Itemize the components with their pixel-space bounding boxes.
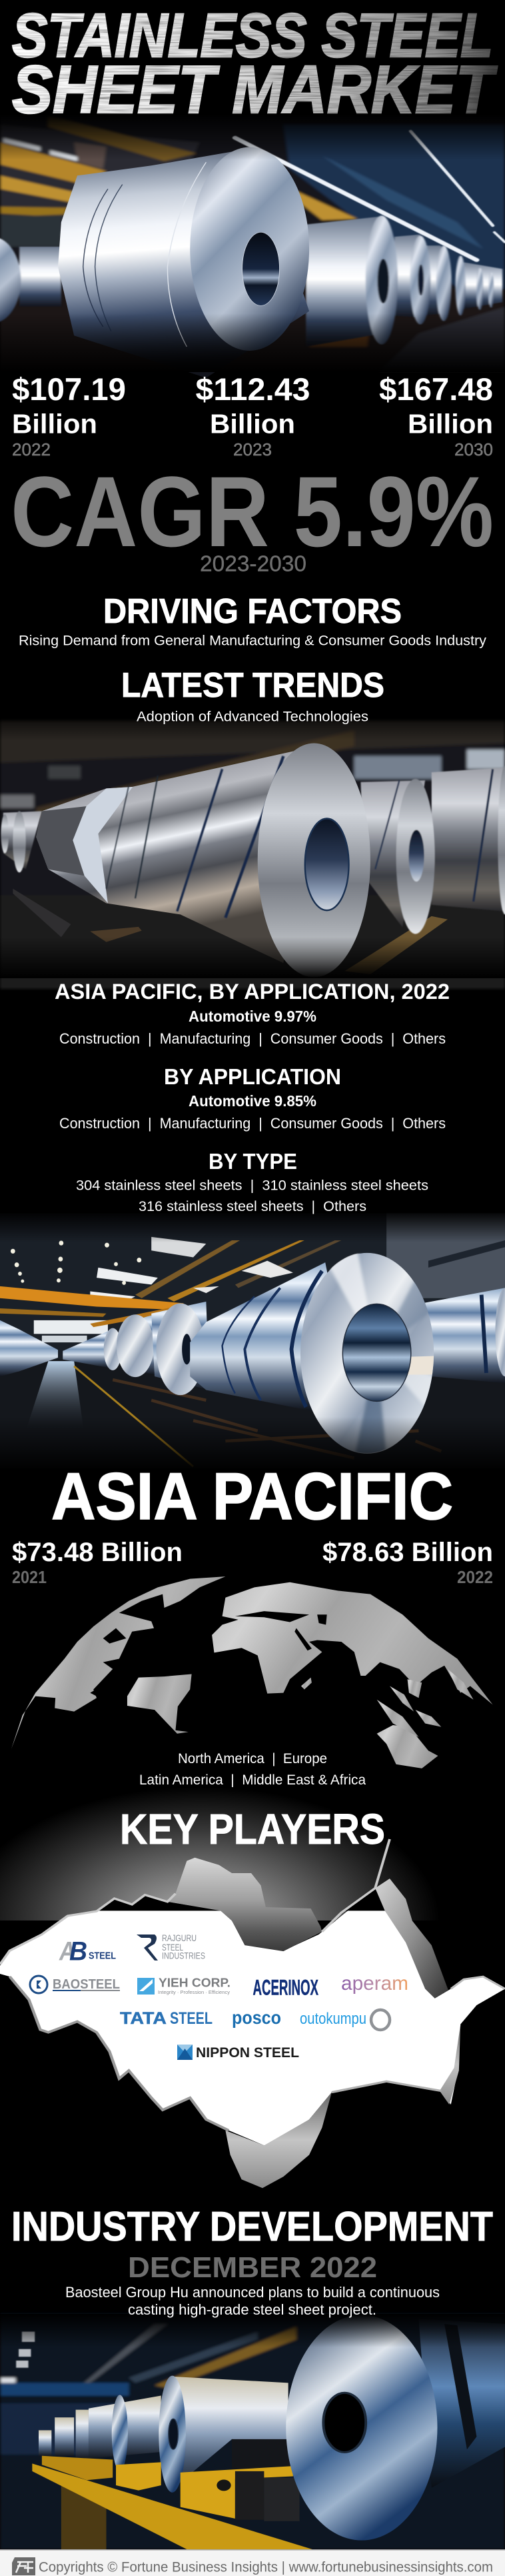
logo: Rajguru Steel Industries: STEEL xyxy=(162,1942,183,1953)
peeled metal flaps xyxy=(0,1839,505,2188)
stat: 2023 value: Billion xyxy=(210,408,295,439)
by application xyxy=(59,1064,446,1132)
logo: Outokumpu: outokumpu xyxy=(300,2010,366,2028)
stat: 2023 value: $112.43 xyxy=(196,371,310,407)
background rollers xyxy=(39,2376,288,2493)
stat: 2023 value xyxy=(196,371,310,459)
photo: row of coils in factory hall xyxy=(0,1210,505,1472)
regional value 2022: $78.63 Billion xyxy=(322,1538,493,1567)
key players heading: KEY PLAYERS xyxy=(120,1805,385,1853)
map: Eurasia and Africa xyxy=(212,1582,493,1704)
stat: 2022 value: $107.19 xyxy=(12,371,126,407)
logo: Yieh Corp xyxy=(137,1977,231,1995)
logo: Baosteel xyxy=(30,1976,120,1993)
industry development: casting high-grade steel sheet project. xyxy=(128,2301,376,2318)
other regions: Latin America | Middle East & Africa xyxy=(139,1772,366,1788)
main coil xyxy=(36,744,370,977)
stat: 2023 value: 2023 xyxy=(233,439,272,459)
logo: Yieh Corp: Integrity · Profession · Efficiency xyxy=(158,1991,231,1995)
logo: Nippon Steel: NIPPON STEEL xyxy=(196,2045,299,2061)
white torn area xyxy=(0,1910,505,2145)
logo: Baosteel: BAOSTEEL xyxy=(53,1977,120,1992)
logo: Yieh Corp: YIEH CORP. xyxy=(159,1977,231,1990)
by application: Construction | Manufacturing | Consumer Goods | Others xyxy=(59,1115,446,1132)
regional value 2022: 2022 xyxy=(457,1567,493,1587)
market value statistics xyxy=(12,371,493,459)
latest trends: Adoption of Advanced Technologies xyxy=(137,708,368,724)
ceiling light strips xyxy=(235,131,505,260)
stat: 2030 value: 2030 xyxy=(454,439,493,459)
main coil xyxy=(286,2315,505,2541)
logo: Rajguru Steel Industries: RAJGURU xyxy=(162,1933,197,1943)
logo: Tata Steel xyxy=(120,2009,213,2028)
map: Madagascar xyxy=(301,1678,312,1689)
industry development: Baosteel Group Hu announced plans to build a continuous xyxy=(65,2284,440,2301)
photo: coils on yellow conveyor rail xyxy=(0,2314,505,2549)
map: inland seas xyxy=(90,1611,327,1698)
industry development xyxy=(11,2204,493,2318)
Asia Pacific by application: Automotive 9.97% xyxy=(189,1008,316,1025)
driving factors xyxy=(19,592,486,648)
footer bar xyxy=(0,2549,505,2576)
stat: 2030 value: $167.48 xyxy=(379,371,493,407)
background coils xyxy=(1,766,505,934)
logo: Posco: posco xyxy=(232,2007,281,2028)
industry development: DECEMBER 2022 xyxy=(128,2251,377,2284)
by type xyxy=(76,1149,428,1214)
driving factors: DRIVING FACTORS xyxy=(103,592,402,631)
other regions: North America | Europe xyxy=(178,1750,327,1766)
far coils xyxy=(0,1302,209,1395)
photo: steel coil warehouse with yellow beams xyxy=(0,113,505,378)
icon: Fortune Business Insights logo xyxy=(12,2557,35,2575)
logo: Rajguru Steel Industries xyxy=(137,1933,205,1961)
regional value 2022 xyxy=(322,1538,493,1587)
map: Australia xyxy=(377,1725,438,1768)
right coil xyxy=(422,1288,505,1383)
Asia Pacific by application: ASIA PACIFIC, BY APPLICATION, 2022 xyxy=(55,980,450,1004)
regional value 2021: 2021 xyxy=(12,1567,47,1587)
by type: BY TYPE xyxy=(209,1149,297,1174)
by application: BY APPLICATION xyxy=(164,1064,341,1089)
regional value 2021: $73.48 Billion xyxy=(12,1538,183,1567)
by application: Automotive 9.85% xyxy=(189,1092,316,1110)
stat: 2022 value xyxy=(12,371,126,459)
main coil xyxy=(190,1250,451,1458)
torn metal sheet panel xyxy=(0,1839,505,2188)
Asia Pacific by application: Construction | Manufacturing | Consumer Goods | Others xyxy=(59,1030,446,1047)
map: Americas north xyxy=(11,1576,225,1749)
stat: 2022 value: 2022 xyxy=(12,439,51,459)
Asia Pacific by application xyxy=(55,980,450,1047)
logo: Tata Steel: TATA xyxy=(120,2009,167,2028)
world map globe xyxy=(11,1576,493,1768)
main coil xyxy=(58,147,309,378)
footer bar: Copyrights © Fortune Business Insights | www.fortunebusinessinsights.com xyxy=(39,2559,493,2575)
logo: AB Steel xyxy=(59,1937,116,1966)
other regions xyxy=(139,1750,366,1788)
by type: 304 stainless steel sheets | 310 stainless steel sheets xyxy=(76,1178,428,1194)
logo: Tata Steel: STEEL xyxy=(170,2009,213,2028)
floor reflection xyxy=(26,1361,84,1431)
pallets xyxy=(113,1380,441,1458)
logo: Rajguru Steel Industries: INDUSTRIES xyxy=(162,1950,205,1961)
Asia Pacific heading: ASIA PACIFIC xyxy=(51,1459,453,1533)
yellow rail and brackets xyxy=(32,2456,312,2549)
stat: 2030 value: Billion xyxy=(408,408,493,439)
logo: AB Steel: STEEL xyxy=(89,1951,116,1962)
driving factors: Rising Demand from General Manufacturing & Consumer Goods Industry xyxy=(19,632,486,648)
latest trends: LATEST TRENDS xyxy=(121,666,384,705)
small background coils xyxy=(0,215,502,347)
key players glow backdrop xyxy=(0,1787,505,1920)
ceiling lights xyxy=(11,1241,141,1285)
logo: AB Steel: A xyxy=(59,1937,75,1966)
regional value 2021 xyxy=(12,1538,183,1587)
photo: large steel coil on pallets xyxy=(0,707,505,989)
title xyxy=(12,1,498,127)
CAGR: 2023-2030 xyxy=(200,551,306,576)
latest trends xyxy=(121,666,384,724)
map: South America xyxy=(127,1674,192,1734)
stat: 2030 value xyxy=(379,371,493,459)
map: Southeast Asia islands xyxy=(377,1669,474,1737)
logo: Acerinox: ACERINOX xyxy=(253,1975,318,1999)
logo: Aperam: aperam xyxy=(341,1973,408,1995)
stat: 2022 value: Billion xyxy=(12,408,97,439)
by type: 316 stainless steel sheets | Others xyxy=(139,1198,366,1214)
logo: AB Steel: B xyxy=(69,1937,87,1966)
